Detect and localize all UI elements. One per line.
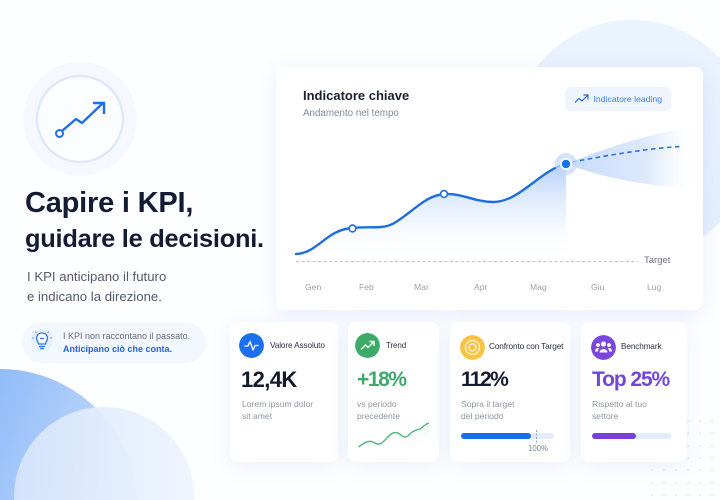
month axis labels: Giu <box>591 282 604 292</box>
description <box>242 399 313 421</box>
chart title: Indicatore chiave <box>303 88 409 103</box>
description <box>357 399 400 421</box>
progress fill <box>592 433 636 439</box>
progress bar <box>592 433 671 439</box>
title <box>25 187 264 253</box>
intro text <box>27 269 166 304</box>
month axis labels: Apr <box>474 282 487 292</box>
title: Capire i KPI, <box>25 187 193 219</box>
description: precedente <box>357 411 400 421</box>
icon: pulse <box>239 333 264 358</box>
icon: light bulb <box>31 329 53 351</box>
card label: Valore Assoluto <box>270 341 325 350</box>
badge: leading indicator <box>565 87 671 111</box>
description: Sopra il target <box>461 399 515 409</box>
forecast band <box>566 127 692 188</box>
data points <box>349 153 577 232</box>
area under curve <box>296 164 566 258</box>
month axis labels: Feb <box>359 282 374 292</box>
panel: benchmark <box>581 322 687 462</box>
icon: rising trend line in circle <box>36 74 124 164</box>
chart subtitle: Andamento nel tempo <box>303 108 399 119</box>
icon: group <box>591 335 616 360</box>
sparkline <box>358 422 430 448</box>
card label: Trend <box>386 341 406 350</box>
badge text: Indicatore leading <box>594 94 662 104</box>
100% marker <box>536 430 537 442</box>
icon: trend arrow <box>574 94 589 103</box>
card label: Benchmark <box>621 342 662 351</box>
month axis labels: Gen <box>305 282 321 292</box>
card label: Confronto con Target <box>489 341 563 351</box>
description: sit amet <box>242 411 272 421</box>
callout text <box>63 331 190 354</box>
description: vs periodo <box>357 399 397 409</box>
callout text: I KPI non raccontano il passato. <box>63 331 190 341</box>
month axis labels <box>305 282 661 292</box>
callout text: Anticipano ciò che conta. <box>63 344 172 354</box>
panel: line chart <box>276 67 703 310</box>
title: guidare le decisioni. <box>25 225 264 253</box>
value: 12,4K <box>241 367 297 392</box>
progress bar <box>461 433 554 439</box>
100% label: 100% <box>528 444 548 453</box>
description: del periodo <box>461 411 504 421</box>
description <box>461 399 515 421</box>
callout: key message <box>22 322 206 363</box>
icon: green trend <box>355 333 380 358</box>
panel: trend <box>348 322 439 462</box>
description: settore <box>592 411 618 421</box>
panel: confronto con target <box>450 322 570 462</box>
target label: Target <box>644 255 670 266</box>
description <box>592 399 647 421</box>
month axis labels: Mar <box>414 282 429 292</box>
value: Top 25% <box>592 368 669 391</box>
icon: target <box>460 335 485 360</box>
line chart <box>294 130 680 262</box>
intro text: e indicano la direzione. <box>27 289 162 304</box>
intro text: I KPI anticipano il futuro <box>27 269 166 284</box>
target line <box>296 260 638 262</box>
month axis labels: Lug <box>647 282 661 292</box>
forecast line <box>572 146 681 162</box>
progress fill <box>461 433 531 439</box>
value: 112% <box>461 368 507 391</box>
panel: valore assoluto <box>230 322 338 462</box>
description: Rispetto al tuo <box>592 399 647 409</box>
month axis labels: Mag <box>530 282 547 292</box>
value: +18% <box>357 368 406 391</box>
data line <box>296 164 566 254</box>
description: Lorem ipsum dolor <box>242 399 313 409</box>
